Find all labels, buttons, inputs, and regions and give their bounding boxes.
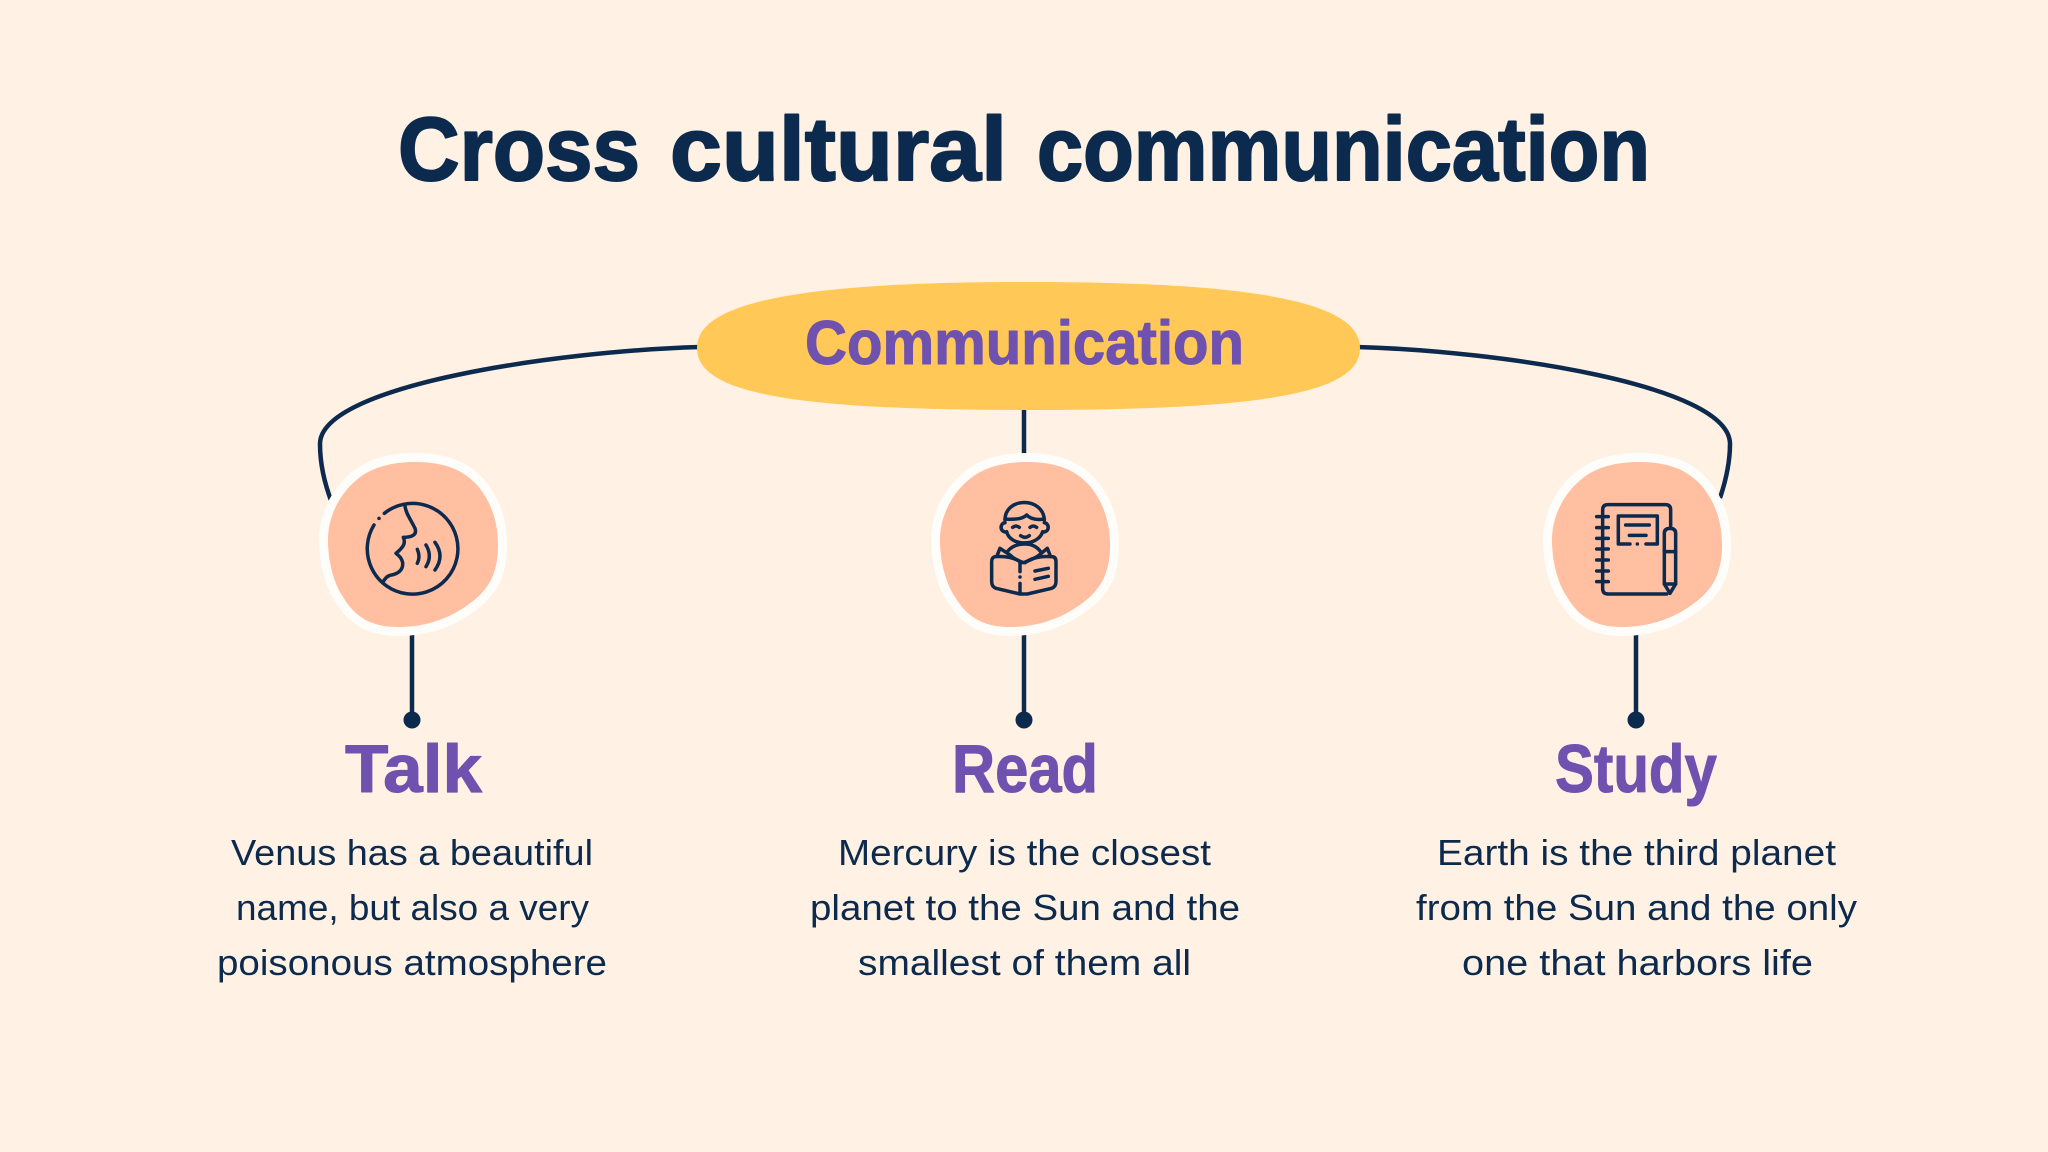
description: poisonous atmosphere: [217, 942, 607, 983]
badge blob: [1552, 462, 1722, 627]
description: from the Sun and the only: [1416, 887, 1857, 928]
connector: left arc: [320, 347, 700, 503]
description: planet to the Sun and the: [810, 887, 1240, 928]
title: communication: [1037, 100, 1650, 200]
title: [398, 100, 1650, 200]
connector: right arc: [1357, 347, 1730, 498]
description: smallest of them all: [858, 942, 1191, 983]
stem and dot: [404, 635, 420, 728]
icon: notebook and pen: [1597, 505, 1676, 594]
badge blob: [940, 462, 1110, 627]
icon: speaking face: [367, 503, 458, 594]
description: [1416, 832, 1857, 983]
title: cultural: [670, 100, 1007, 200]
description: name, but also a very: [236, 887, 589, 928]
description: Mercury is the closest: [838, 832, 1211, 873]
column: Talk: [217, 462, 607, 983]
badge blob: [328, 462, 498, 627]
description: [810, 832, 1240, 983]
heading: Study: [1555, 731, 1717, 807]
icon: child reading a book: [992, 502, 1056, 594]
heading: Talk: [345, 731, 482, 807]
title: Cross: [398, 100, 640, 200]
stem and dot: [1628, 635, 1644, 728]
description: Earth is the third planet: [1437, 832, 1836, 873]
column: Read: [810, 462, 1240, 983]
stem and dot: [1016, 635, 1032, 728]
description: [217, 832, 607, 983]
central node: Communication: [697, 282, 1360, 410]
connector: centre stem: [1022, 405, 1026, 456]
label: Communication: [805, 309, 1244, 378]
description: one that harbors life: [1462, 942, 1813, 983]
description: Venus has a beautiful: [231, 832, 593, 873]
heading: Read: [952, 731, 1098, 807]
yellow blob: [697, 282, 1360, 410]
column: Study: [1416, 462, 1857, 983]
